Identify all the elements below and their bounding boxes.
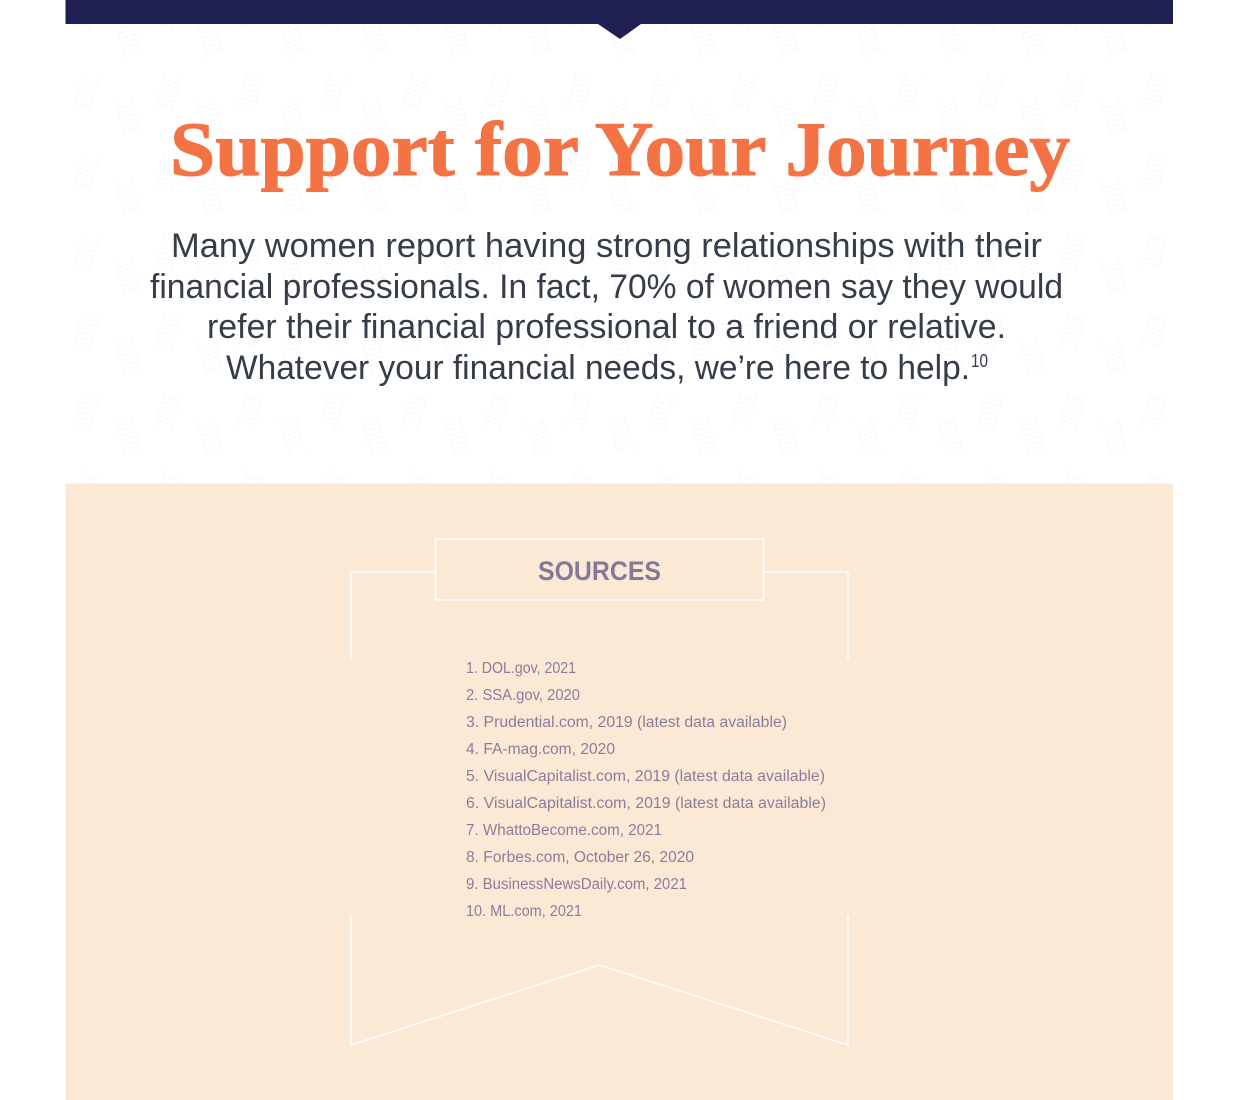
sources list: 6. VisualCapitalist.com, 2019 (latest data available) — [466, 795, 826, 812]
intro text block: Whatever your financial needs, we’re here to help. — [226, 349, 970, 387]
sources heading box: SOURCES — [538, 556, 661, 586]
sources list: 7. WhattoBecome.com, 2021 — [466, 822, 662, 839]
sources list: 1. DOL.gov, 2021 — [466, 660, 576, 677]
sources heading box — [436, 539, 764, 600]
intro text block — [150, 227, 1063, 387]
sources list: 8. Forbes.com, October 26, 2020 — [466, 849, 694, 866]
intro text block: 10 — [971, 351, 988, 371]
ribbon frame — [351, 572, 848, 1045]
title: Support for Your Journey — [170, 106, 1070, 192]
sources list: 10. ML.com, 2021 — [466, 903, 582, 920]
intro text block: financial professionals. In fact, 70% of women say they would — [150, 268, 1063, 306]
panel: sources — [66, 484, 1173, 1100]
sources list: 9. BusinessNewsDaily.com, 2021 — [466, 876, 687, 893]
top banner with notch — [66, 0, 1173, 39]
sources list: 3. Prudential.com, 2019 (latest data available) — [466, 714, 787, 731]
ladder background pattern — [66, 0, 1173, 484]
intro text block: refer their financial professional to a friend or relative. — [207, 308, 1006, 346]
sources list — [466, 660, 826, 920]
sources list: 2. SSA.gov, 2020 — [466, 687, 580, 704]
intro text block: Many women report having strong relationships with their — [171, 227, 1042, 265]
sources list: 4. FA-mag.com, 2020 — [466, 741, 615, 758]
sources list: 5. VisualCapitalist.com, 2019 (latest data available) — [466, 768, 825, 785]
